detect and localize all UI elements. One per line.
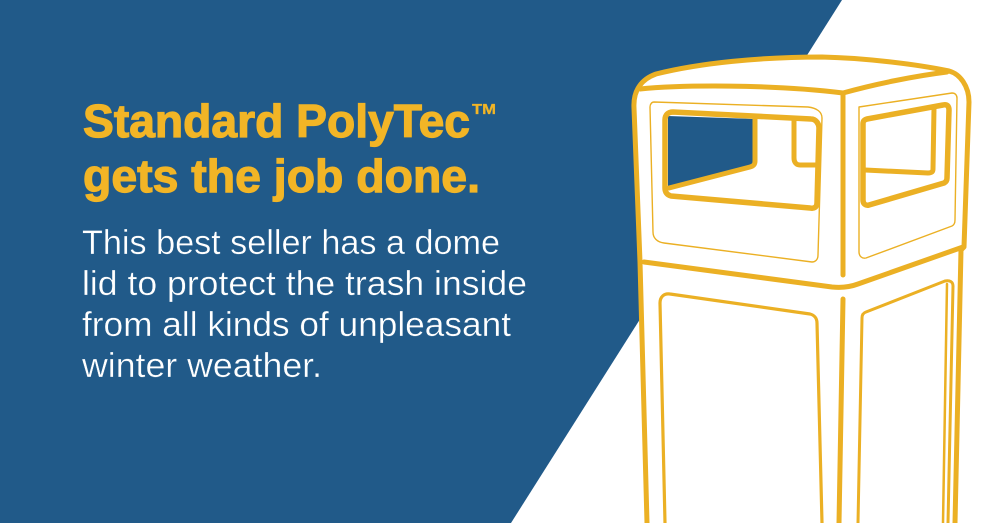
- lid base edge: [644, 247, 963, 287]
- heading: gets the job done.: [83, 150, 480, 202]
- body text: [81, 224, 527, 385]
- lower right panel: [858, 281, 953, 523]
- corner post lower: [839, 299, 843, 523]
- body text: lid to protect the trash inside: [82, 265, 527, 303]
- lid edges: [640, 72, 947, 93]
- left window inner edges: [669, 119, 755, 188]
- heading: TM: [472, 101, 496, 118]
- right window inner edges: [865, 108, 934, 173]
- right window frame: [863, 105, 949, 205]
- body text: winter weather.: [81, 347, 322, 385]
- right thin panel: [859, 93, 957, 258]
- body text: This best seller has a dome: [82, 224, 500, 262]
- lower right panel inner line: [943, 284, 947, 523]
- heading: Standard PolyTec: [83, 95, 470, 147]
- illustration: trash receptacle: [634, 57, 969, 523]
- lower left panel: [660, 294, 822, 523]
- left thin panel: [650, 102, 822, 262]
- left window small pane: [794, 119, 817, 165]
- body text: from all kinds of unpleasant: [82, 306, 512, 344]
- window opening showing blue: [668, 116, 755, 188]
- receptacle body outline: [634, 57, 969, 523]
- left window frame: [665, 112, 819, 208]
- corner post upper: [840, 94, 846, 275]
- heading: [83, 95, 496, 202]
